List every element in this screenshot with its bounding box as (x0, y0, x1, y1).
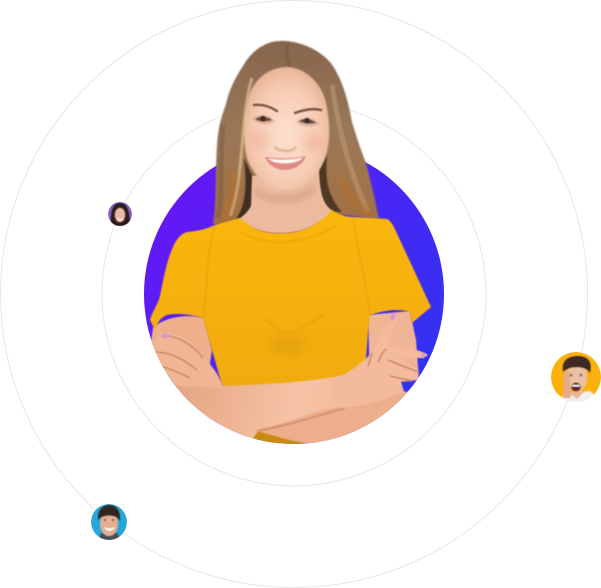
eye sockets (252, 115, 320, 126)
mouth (265, 156, 306, 170)
nose (275, 147, 296, 151)
face (244, 67, 329, 190)
avatar: woman on purple (108, 202, 132, 227)
eyebrows (254, 105, 321, 113)
clipped torso (150, 210, 431, 450)
inner orbit ring (102, 102, 486, 486)
hair (213, 41, 379, 226)
shirt folds (203, 219, 370, 318)
avatar: surprised man on gold (551, 352, 601, 404)
upper arm left (150, 316, 212, 390)
lower forearm (256, 390, 408, 444)
shirt body (150, 210, 431, 395)
main forearm (174, 374, 344, 438)
shirt peek at bottom (245, 430, 305, 444)
gradient disc behind the person (144, 144, 444, 444)
cheek blush (250, 131, 324, 151)
neck (239, 170, 333, 233)
right hand (332, 312, 428, 408)
left hand fingers (154, 333, 223, 388)
avatar: smiling man on blue (91, 504, 127, 541)
upper arm right (368, 311, 419, 385)
eyes (255, 117, 316, 124)
person: young woman with crossed arms (150, 41, 431, 450)
